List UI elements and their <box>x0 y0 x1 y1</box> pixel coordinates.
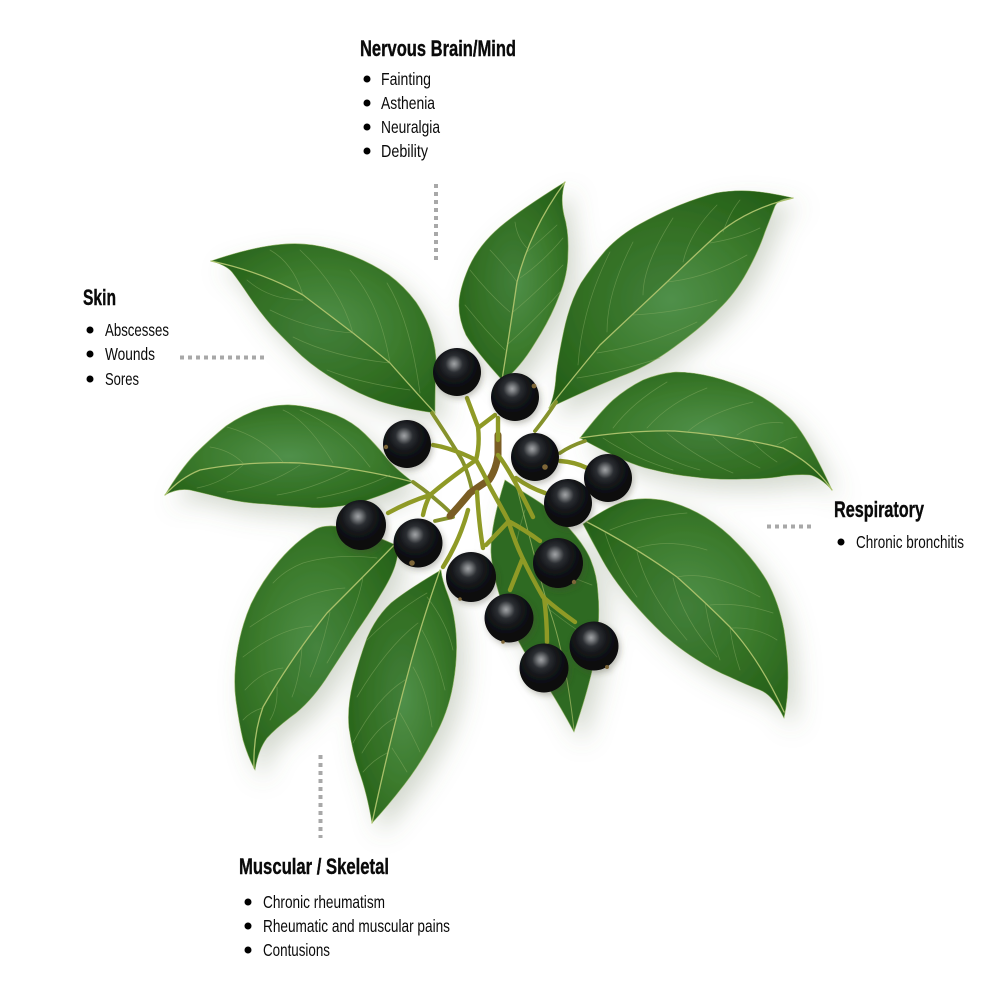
stems and branches <box>388 398 587 642</box>
plant illustration <box>165 182 832 823</box>
list <box>244 892 450 960</box>
leaf: lower left <box>235 526 398 770</box>
list: Chronic rheumatism <box>263 892 385 912</box>
leaves <box>165 182 832 823</box>
text block: Respiratory <box>834 497 964 552</box>
list: Debility <box>381 141 428 161</box>
list <box>364 69 440 161</box>
heading: Skin <box>83 285 116 310</box>
leaf: top left <box>211 244 436 413</box>
list: Wounds <box>105 344 155 364</box>
list: Contusions <box>263 940 330 960</box>
list: Fainting <box>381 69 431 89</box>
text block: Nervous Brain/Mind <box>360 36 516 161</box>
leaf: left <box>165 405 413 508</box>
list: Abscesses <box>105 320 169 340</box>
list: Rheumatic and muscular pains <box>263 916 450 936</box>
connector: skin <box>180 356 266 360</box>
berries <box>336 348 632 692</box>
brown main branch <box>450 435 498 516</box>
text block: Skin <box>83 285 169 389</box>
connector: muscular <box>318 755 322 838</box>
leaf: lower right <box>583 499 788 718</box>
heading: Nervous Brain/Mind <box>360 36 516 61</box>
text block: Muscular / Skeletal <box>239 854 450 960</box>
leaf: top centre <box>459 182 568 381</box>
connector: respiratory <box>767 524 813 528</box>
list <box>86 320 169 389</box>
leaf: bottom centre-left <box>348 570 457 823</box>
connector: nervous <box>434 184 438 262</box>
list: Neuralgia <box>381 117 440 137</box>
list: Chronic bronchitis <box>856 532 964 552</box>
heading: Respiratory <box>834 497 925 522</box>
leaf: top right <box>549 191 793 408</box>
berry stalks <box>388 398 587 642</box>
list: Asthenia <box>381 93 435 113</box>
heading: Muscular / Skeletal <box>239 854 389 879</box>
leaf: lower centre behind berries <box>491 480 599 732</box>
leaf: right <box>580 372 832 490</box>
leaf petioles <box>413 402 585 521</box>
list: Sores <box>105 369 139 389</box>
